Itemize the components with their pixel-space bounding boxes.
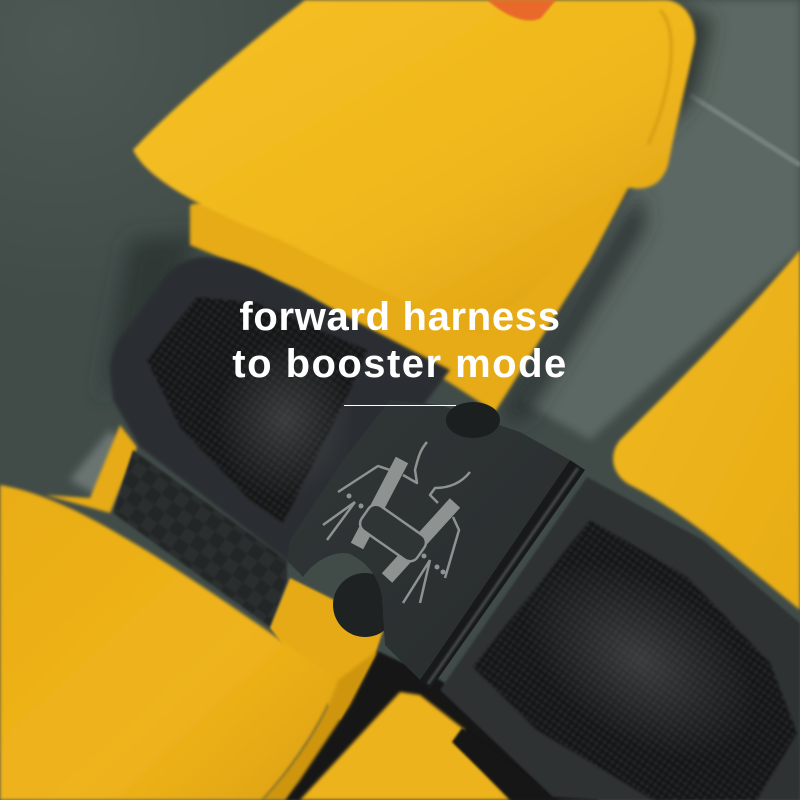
chest clip symbol (357, 501, 429, 565)
yellow strip lower left of clip (45, 425, 137, 513)
chest clip left loop (110, 257, 450, 570)
caption heading: forward harness (239, 295, 561, 339)
dark gap behind the lower pads (285, 650, 600, 800)
upper yellow shoulder pad (133, 0, 695, 335)
orange tag (487, 0, 556, 21)
lower left yellow pad (0, 485, 338, 800)
harness straps (357, 460, 402, 546)
left webbing strap (113, 450, 287, 627)
rule under caption (344, 405, 456, 406)
caption heading (232, 295, 568, 386)
lower right webbing strap (452, 728, 560, 800)
lower yellow pad behind upper pad (190, 175, 635, 412)
bottom centre yellow pad (300, 692, 510, 800)
caption heading: to booster mode (232, 342, 568, 386)
yellow fill under clip (270, 578, 385, 720)
chest clip right loop (440, 477, 800, 800)
chest clip separator band (420, 460, 585, 690)
chest clip centre body (287, 400, 570, 680)
icon: harness diagram on clip (323, 442, 470, 603)
right yellow pad (613, 250, 800, 610)
